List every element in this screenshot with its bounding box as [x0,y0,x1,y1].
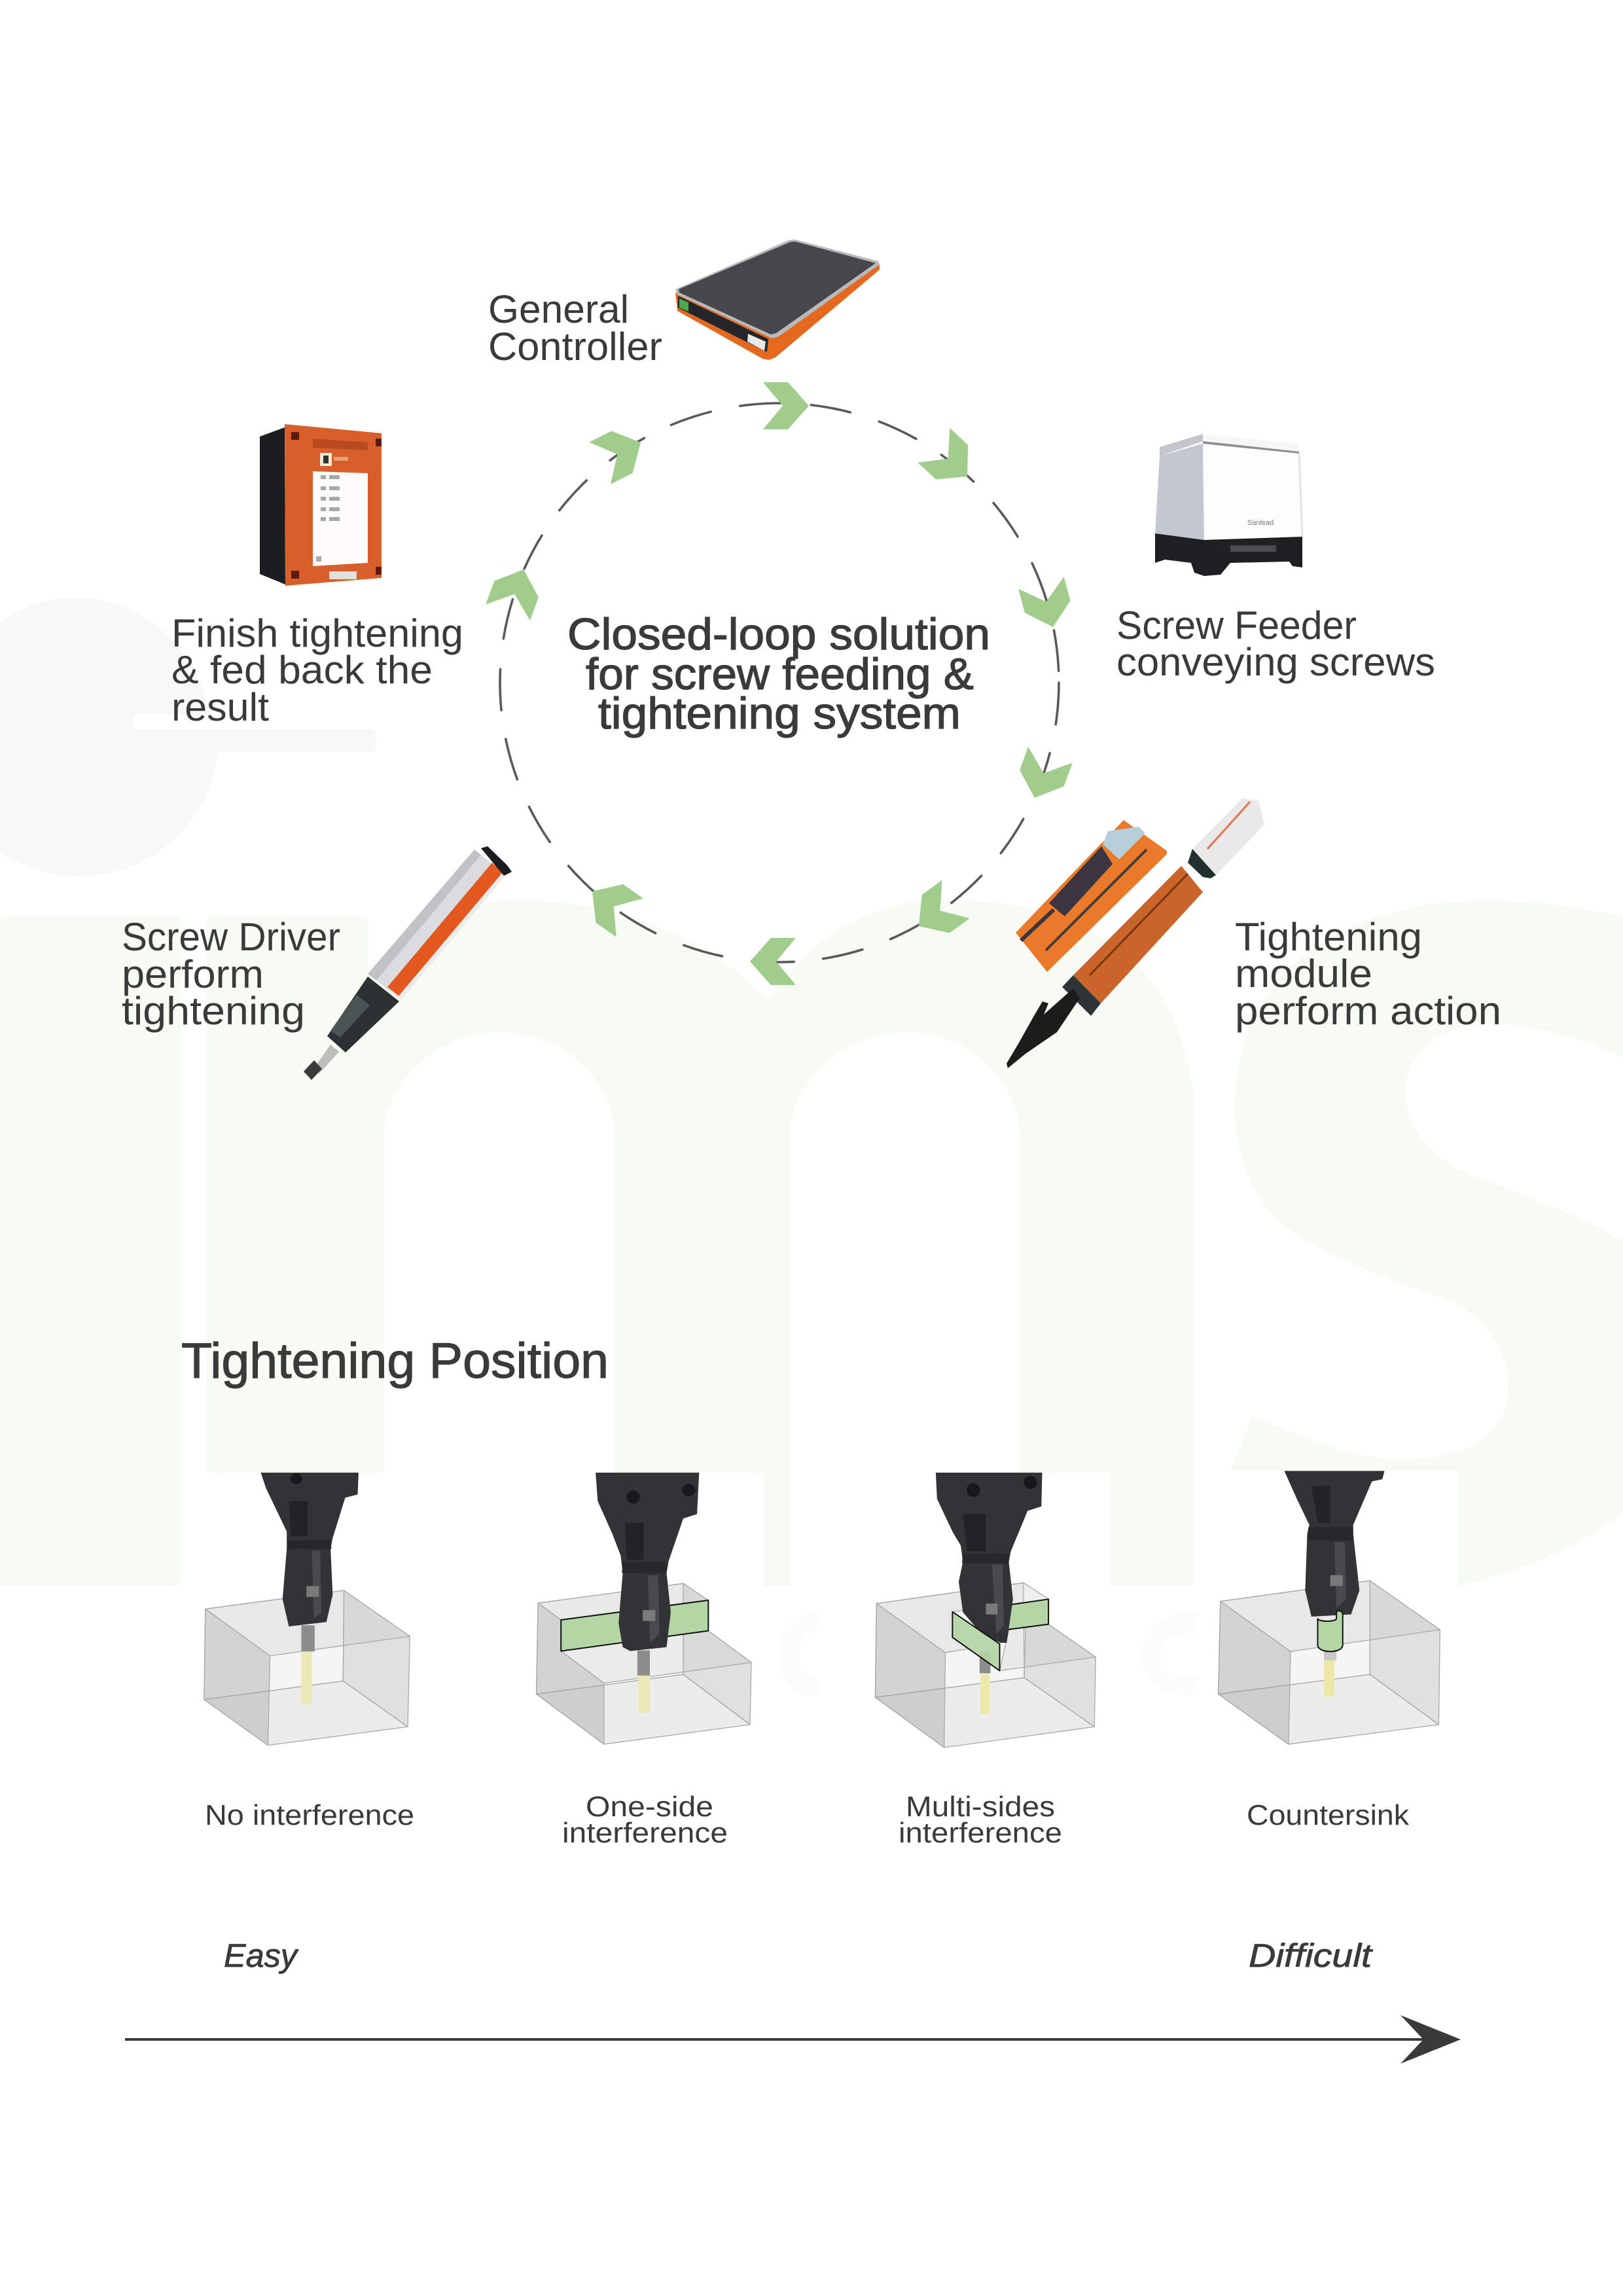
process loop: dashed circle with chevrons [470,373,1089,992]
illustration: one-side interference [537,1473,751,1744]
icon: tightening module [1007,798,1264,1068]
label: tightening module: module [1235,952,1372,996]
label: screw driver [122,915,340,1033]
label: screw driver: Screw Driver [122,915,340,959]
label: screw driver: perform [122,952,264,996]
interference wall right [1007,1599,1048,1630]
tightening tool [1007,798,1264,1068]
interference wall [561,1600,708,1651]
label: no interference: No interference [205,1799,414,1831]
illustration: countersink [1219,1471,1440,1744]
icon: screw driver [304,846,512,1080]
label: difficult: Difficult [1249,1937,1373,1974]
label: finish tightening: Finish tightening [171,611,463,655]
arrow: easy to difficult [125,2015,1461,2064]
label: one-side interference: interference [562,1817,728,1849]
label: screw feeder: Screw Feeder [1116,603,1357,647]
label: one-side interference [562,1791,728,1849]
label: finish tightening [171,611,463,729]
icon: screw feeder: Sanlead [1247,519,1274,527]
label: multi-sides interference [899,1791,1062,1849]
label: general controller [488,287,662,368]
countersink cylinder [1317,1611,1343,1651]
controller module [1016,820,1167,972]
label: tightening module: Tightening [1235,915,1422,959]
label: general controller: Controller [488,325,662,368]
label: tightening module [1235,915,1501,1033]
central title: for screw feeding & [586,649,974,699]
label: multi-sides interference: Multi-sides [906,1791,1055,1823]
icon: screw feeder [1155,434,1302,576]
label: easy: Easy [224,1937,299,1974]
label: finish tightening: & fed back the [171,648,433,692]
label: one-side interference: One-side [586,1791,713,1823]
interference wall left [952,1612,999,1671]
icon: finish result display [260,424,382,586]
icon: general controller [675,240,880,360]
central title: tightening system [598,689,961,738]
label: screw feeder: conveying screws [1116,640,1435,684]
central title [567,609,990,738]
illustration: multi-sides interference [875,1473,1096,1748]
label: screw driver: tightening [122,989,305,1033]
label: multi-sides interference: interference [899,1817,1062,1849]
heading: tightening position: Tightening Position [181,1333,609,1389]
label: screw feeder [1116,603,1435,684]
label: finish tightening: result [171,685,269,729]
label: tightening module: perform action [1235,989,1501,1033]
central title: Closed-loop solution [567,609,990,659]
label: countersink: Countersink [1247,1799,1410,1831]
illustration: no interference [204,1473,410,1746]
label: general controller: General [488,287,629,331]
